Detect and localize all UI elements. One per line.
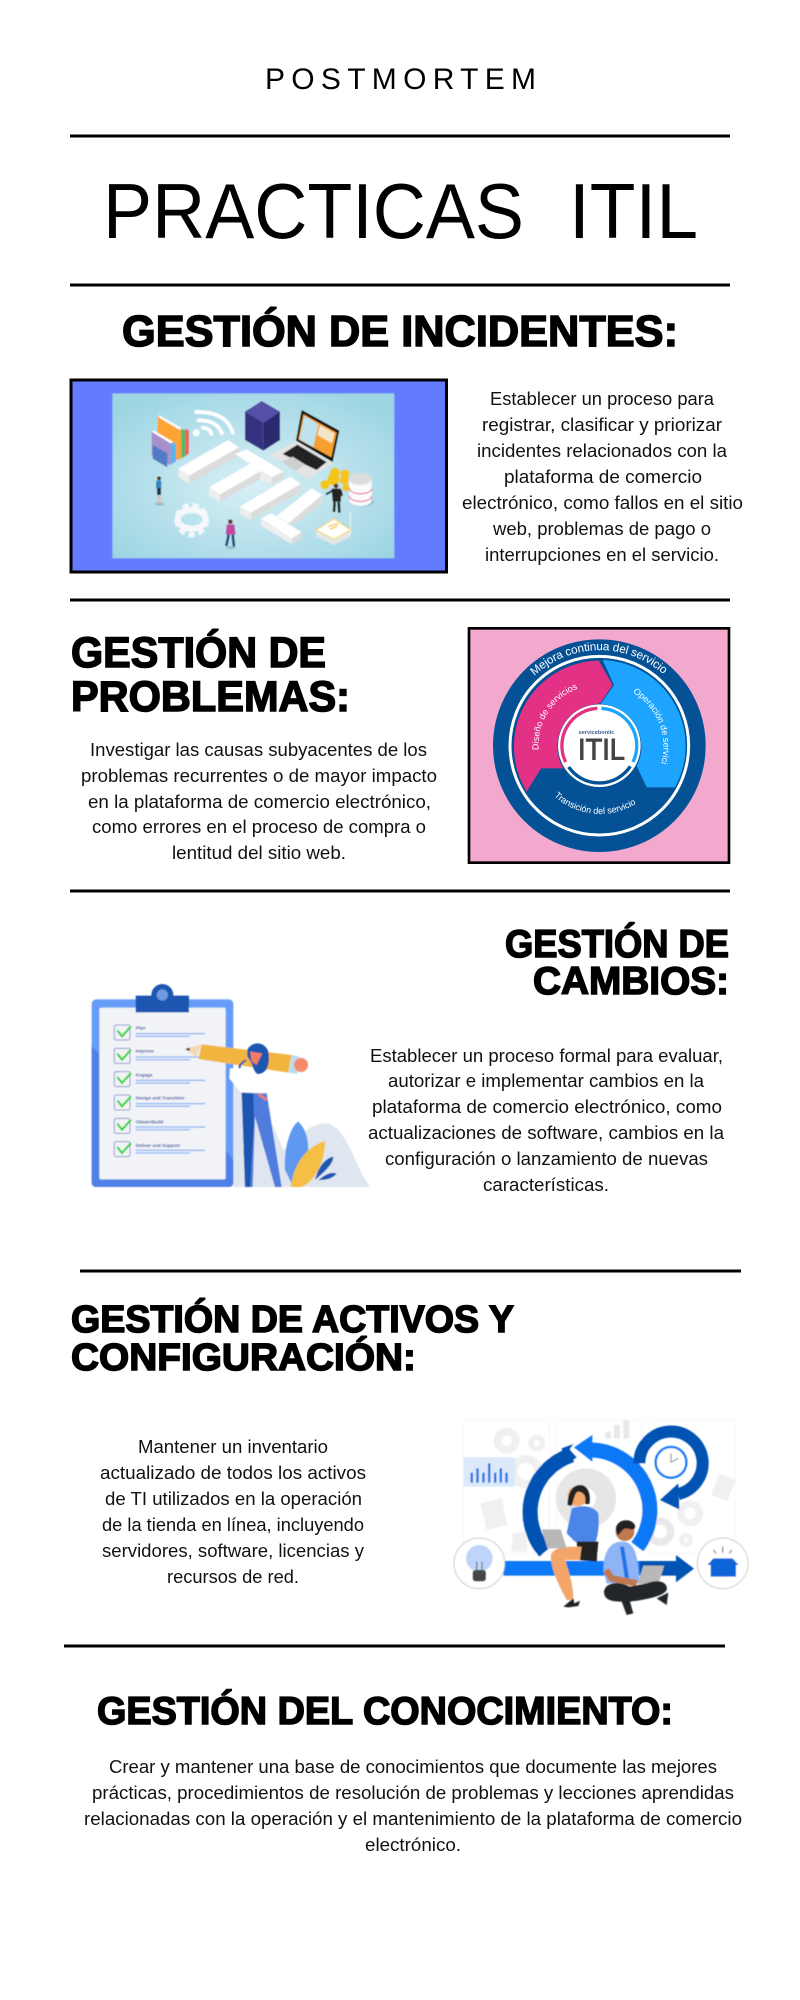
- figure: man walking: [226, 519, 236, 549]
- heading: gestión de problemas: PROBLEMAS:: [71, 673, 350, 721]
- segment label: transición: Transición del servicio: [556, 791, 636, 814]
- text block: activos: actualizado de todos los activos: [100, 1463, 366, 1483]
- text block: cambios: configuración o lanzamiento de nuevas: [385, 1149, 708, 1169]
- checklist row: Deliver and Support: Deliver and Support: [136, 1143, 180, 1148]
- background gears: [498, 1432, 699, 1545]
- text block: incidentes: incidentes relacionados con la: [477, 441, 728, 461]
- checklist row: Deliver and Support: [114, 1142, 205, 1157]
- text block: incidentes: Establecer un proceso para: [490, 389, 715, 409]
- ring label: mejora continua: Mejora continua del servicio: [530, 642, 666, 676]
- checklist row: Obtain/Build: Obtain/Build: [136, 1119, 163, 1124]
- center label: ITIL: ITIL: [578, 734, 625, 767]
- figure: woman with laptop: [542, 1485, 599, 1607]
- text block: activos: de la tienda en línea, incluyendo: [102, 1515, 364, 1535]
- figure: woman standing: [155, 476, 164, 506]
- horizontal arrow: [503, 1555, 694, 1582]
- icon: books: [152, 415, 189, 467]
- text block: conocimiento: Crear y mantener una base de conocimientos que documente las mejores: [109, 1757, 717, 1777]
- text block: cambios: actualizaciones de software, cambios en la: [368, 1123, 725, 1143]
- text block: incidentes: electrónico, como fallos en el sitio: [462, 493, 743, 513]
- cycle arrow: bright arc: [574, 1435, 650, 1547]
- text block: cambios: autorizar e implementar cambios en la: [388, 1071, 705, 1091]
- background documents: [480, 1473, 735, 1552]
- text block: problemas: como errores en el proceso de compra o: [92, 817, 426, 837]
- title: PRACTICAS ITIL: PRACTICAS: [103, 167, 524, 255]
- text block: cambios: [368, 1046, 725, 1195]
- text block: cambios: plataforma de comercio electrónico, como: [372, 1097, 722, 1117]
- illustration: checklist with woman and pencil: [92, 984, 370, 1187]
- icon: open box: [697, 1538, 748, 1589]
- center label: ITIL: serviceboniic: [579, 730, 614, 736]
- section: gestión de cambios: [92, 922, 729, 1195]
- checklist row: Obtain/Build: [114, 1118, 205, 1133]
- heading: gestión de activos y configuración: [71, 1297, 514, 1379]
- checklist row: Design and Transition: Design and Transition: [136, 1096, 184, 1101]
- figure: businessman: [326, 484, 342, 513]
- text block: incidentes: plataforma de comercio: [504, 467, 702, 487]
- checklist row: Design and Transition: [114, 1095, 205, 1110]
- text block: conocimiento: [84, 1757, 742, 1855]
- icon: router: [316, 512, 351, 545]
- clipboard: [92, 984, 233, 1187]
- wheel segment: transición del servicio: [529, 768, 673, 830]
- section: gestión de problemas: [71, 627, 730, 864]
- text block: incidentes: registrar, clasificar y priorizar: [482, 415, 722, 435]
- text block: conocimiento: prácticas, procedimientos de resolución de problemas y lecciones aprendidas: [92, 1783, 734, 1803]
- background hills: [233, 1080, 370, 1187]
- figure: man with laptop: [603, 1520, 668, 1615]
- plant leaves: [285, 1122, 337, 1187]
- icon: laptop: [270, 410, 339, 479]
- wheel segment: operación de servicio: [601, 660, 686, 787]
- heading: gestión de cambios: GESTIÓN DE: [505, 922, 729, 966]
- text block: conocimiento: relacionadas con la operación y el mantenimiento de la plataforma de comercio: [84, 1809, 742, 1829]
- segment label: diseño: Diseño de servicios: [532, 684, 578, 750]
- text block: problemas: Investigar las causas subyacentes de los: [90, 740, 427, 760]
- icon: wifi: [195, 412, 233, 434]
- text block: activos: [100, 1437, 366, 1587]
- text block: problemas: problemas recurrentes o de mayor impacto: [81, 766, 437, 786]
- icon: gold coins: [320, 468, 350, 491]
- checklist row: Plan: [114, 1025, 205, 1040]
- text block: incidentes: [462, 389, 743, 565]
- image panel: ITIL service lifecycle wheel: [468, 627, 730, 864]
- chart panel: [463, 1457, 515, 1487]
- checklist row: Improve: Improve: [136, 1049, 154, 1054]
- text block: activos: recursos de red.: [167, 1567, 299, 1587]
- text block: activos: de TI utilizados en la operación: [105, 1489, 362, 1509]
- checklist row: Engage: Engage: [136, 1072, 153, 1077]
- icon: ITIL isometric blocks: [178, 440, 322, 544]
- section: gestión de activos y configuración: [71, 1297, 748, 1615]
- checklist row: Improve: [114, 1048, 205, 1063]
- checklist row: Plan: Plan: [136, 1025, 146, 1030]
- heading: gestión de problemas: [71, 628, 350, 721]
- segment label: operación: Operación de servicio: [634, 688, 670, 764]
- center ring: [562, 708, 637, 783]
- text block: problemas: [81, 740, 437, 863]
- text block: cambios: Establecer un proceso formal para evaluar,: [370, 1046, 723, 1066]
- heading: gestión de activos y configuración: GESTIÓN DE ACTIVOS Y: [71, 1297, 514, 1341]
- heading: gestión de problemas: GESTIÓN DE: [71, 628, 326, 677]
- text block: incidentes: web, problemas de pago o: [492, 519, 711, 539]
- image panel: ITIL isometric illustration: [71, 380, 446, 572]
- text block: problemas: lentitud del sitio web.: [172, 843, 346, 863]
- icon: clock: [656, 1447, 686, 1478]
- clock arrow: [639, 1432, 703, 1509]
- background bars: [605, 1420, 629, 1438]
- icon: giant pencil: [185, 1044, 308, 1074]
- text block: incidentes: interrupciones en el servicio.: [485, 545, 719, 565]
- heading: gestión de activos y configuración: CONFIGURACIÓN:: [71, 1335, 416, 1379]
- heading: gestión del conocimiento: GESTIÓN DEL CONOCIMIENTO:: [97, 1689, 673, 1733]
- figure: woman legs and shirt: [229, 1068, 282, 1187]
- cycle arrow: dark arc: [530, 1444, 577, 1552]
- title: PRACTICAS ITIL: ITIL: [569, 167, 698, 255]
- icon: database: [349, 473, 374, 507]
- heading: gestión de incidentes: GESTIÓN DE INCIDENTES:: [122, 306, 678, 356]
- icon: light bulb: [454, 1538, 505, 1589]
- section: gestión de incidentes: [71, 306, 743, 572]
- text block: cambios: características.: [483, 1175, 609, 1195]
- icon: server rack: [245, 401, 280, 451]
- figure: woman head: [240, 1043, 269, 1074]
- icon: gear: [177, 505, 206, 535]
- checklist row: Engage: [114, 1072, 205, 1087]
- text block: activos: servidores, software, licencias y: [102, 1541, 364, 1561]
- text block: conocimiento: electrónico.: [365, 1835, 461, 1855]
- subtitle: POSTMORTEM: POSTMORTEM: [265, 63, 536, 96]
- text block: activos: Mantener un inventario: [138, 1437, 328, 1457]
- illustration: continuous cycle with two people: [454, 1420, 748, 1615]
- wheel segment: diseño de servicios: [514, 661, 613, 792]
- faint background panels: [463, 1420, 735, 1553]
- heading: gestión de cambios: CAMBIOS:: [533, 960, 729, 1003]
- text block: problemas: en la plataforma de comercio electrónico,: [88, 792, 431, 812]
- section: gestión del conocimiento: [84, 1689, 742, 1855]
- heading: gestión de cambios: [505, 922, 729, 1003]
